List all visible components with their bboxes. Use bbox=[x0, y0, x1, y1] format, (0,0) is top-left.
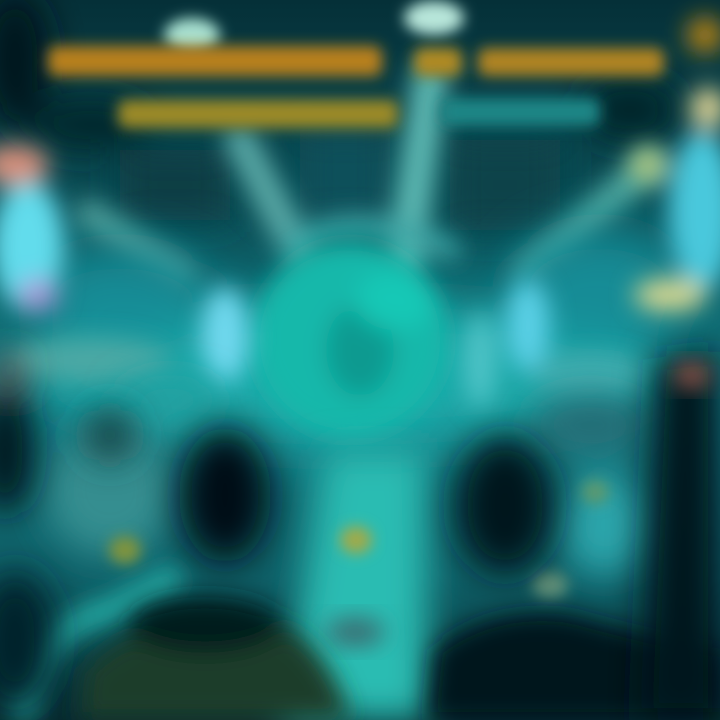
audience silhouette: far right person bbox=[640, 350, 720, 720]
left teal arc bbox=[22, 575, 180, 720]
mid-band glow bbox=[30, 230, 690, 445]
audience silhouette: far left person bbox=[0, 354, 134, 710]
mid audience tones bbox=[45, 380, 650, 575]
yellow accents bbox=[109, 480, 609, 599]
right bright panel bbox=[630, 17, 720, 311]
floor patch bbox=[325, 618, 385, 646]
audience silhouette: right person bbox=[455, 435, 555, 575]
far right person accent bbox=[674, 363, 710, 387]
title bars bbox=[48, 46, 664, 128]
left bright panel bbox=[0, 145, 64, 311]
ceiling lights bbox=[164, 1, 464, 52]
central circle bbox=[252, 242, 448, 438]
right person shoulders bbox=[428, 613, 720, 720]
top dark corners bbox=[0, 0, 680, 230]
lower central column bbox=[280, 450, 430, 720]
light blue glow panels bbox=[10, 279, 650, 408]
ceiling rays bbox=[90, 80, 650, 275]
left person shoulders bbox=[80, 597, 350, 720]
audience silhouette: left person bbox=[179, 427, 271, 563]
